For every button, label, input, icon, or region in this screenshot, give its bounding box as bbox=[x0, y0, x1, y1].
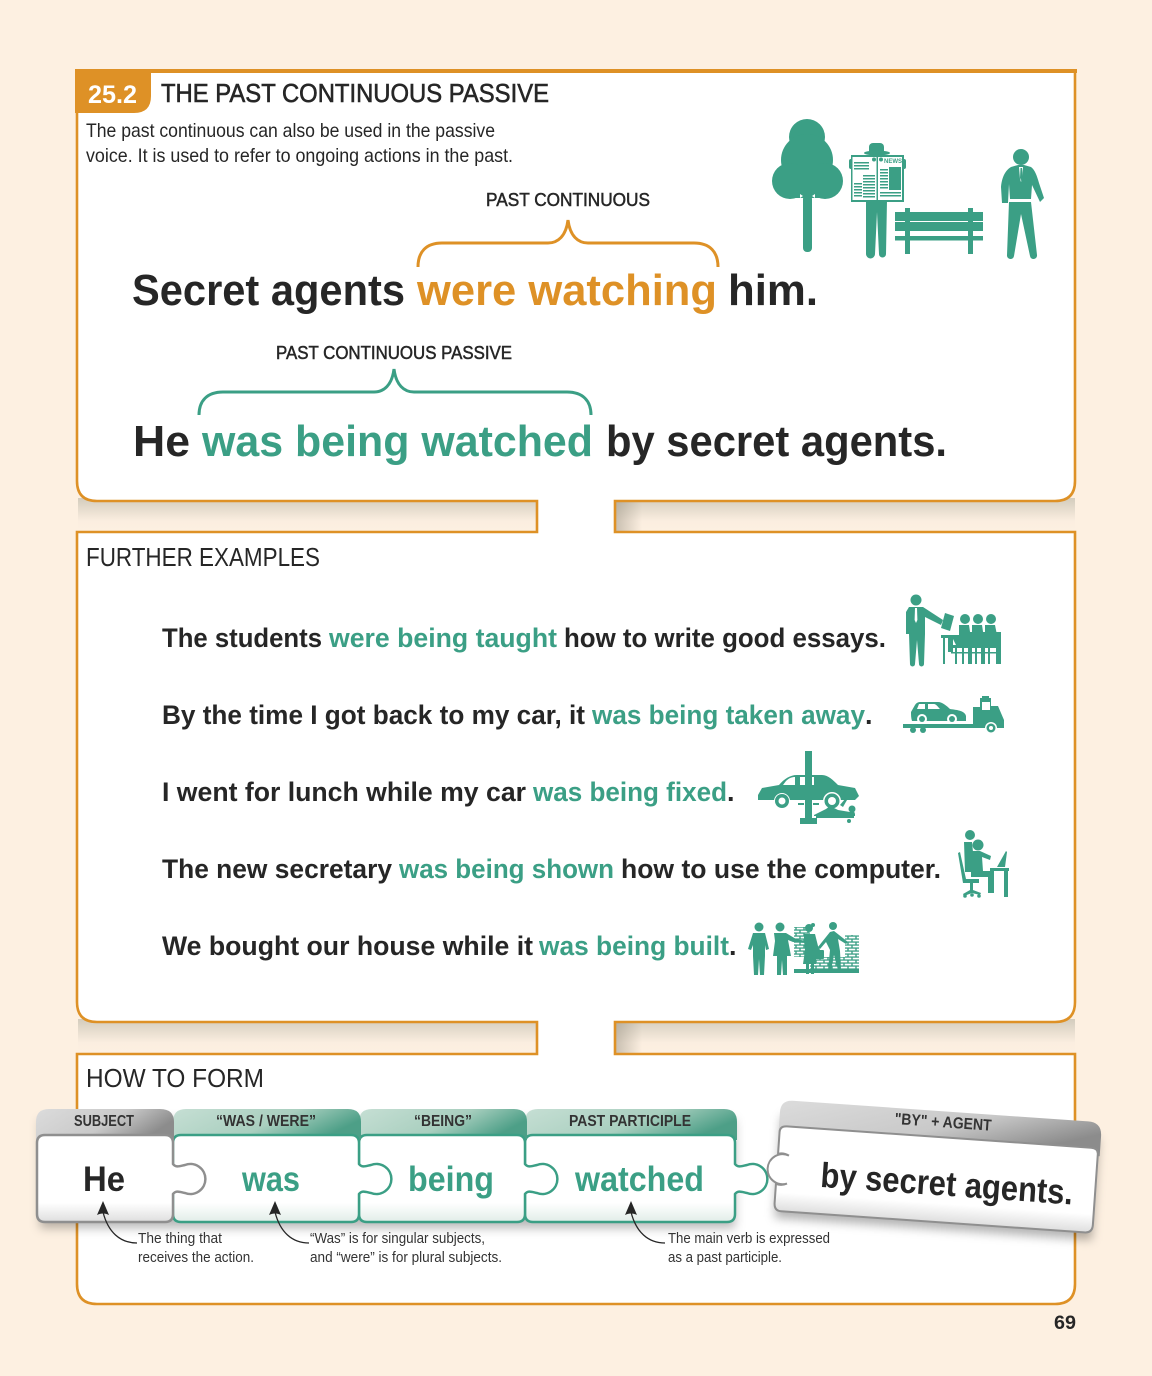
callout: subject note bbox=[97, 1201, 254, 1266]
example 3: was being fixed bbox=[532, 777, 727, 807]
callout: was / were note: “Was” is for singular subjects, bbox=[310, 1230, 485, 1247]
panel shadow in connector gaps bbox=[78, 498, 1075, 1053]
example 3 bbox=[162, 777, 735, 807]
puzzle piece: being: “BEING” bbox=[414, 1113, 472, 1130]
callout: was / were note bbox=[269, 1201, 502, 1266]
puzzle piece: by + agent: by secret agents. bbox=[819, 1156, 1074, 1212]
active sentence: were watching bbox=[416, 266, 717, 315]
callout: subject note: receives the action. bbox=[138, 1249, 254, 1266]
example 5: We bought our house while it bbox=[162, 931, 533, 961]
puzzle piece: subject: SUBJECT bbox=[74, 1113, 134, 1130]
example 4: was being shown bbox=[398, 854, 614, 884]
example 2 bbox=[162, 700, 873, 730]
example 5: was being built bbox=[538, 931, 729, 961]
callout: past participle note bbox=[625, 1201, 830, 1266]
example 1 bbox=[162, 623, 886, 653]
active sentence: Secret agents bbox=[132, 266, 405, 315]
heading: HOW TO FORM bbox=[86, 1063, 264, 1093]
heading: THE PAST CONTINUOUS PASSIVE bbox=[161, 78, 549, 108]
example 4 bbox=[162, 854, 941, 884]
passive sentence: was being watched bbox=[201, 417, 593, 466]
icon: teacher and students bbox=[906, 594, 1001, 666]
label: past continuous: PAST CONTINUOUS bbox=[486, 190, 650, 210]
puzzle piece: subject: He bbox=[83, 1160, 125, 1199]
icon: tow truck bbox=[903, 696, 1004, 734]
puzzle piece: was / were: “WAS / WERE” bbox=[216, 1113, 316, 1130]
example 5 bbox=[162, 931, 737, 961]
icon: agent with newspaper bbox=[849, 143, 906, 258]
intro text: The past continuous can also be used in the passive bbox=[86, 120, 495, 142]
panel: further examples bbox=[86, 542, 1009, 975]
label: past continuous passive: PAST CONTINUOUS PASSIVE bbox=[276, 343, 512, 363]
example 1: how to write good essays. bbox=[564, 623, 886, 653]
example 2: was being taken away bbox=[591, 700, 865, 730]
puzzle piece: past participle: PAST PARTICIPLE bbox=[569, 1113, 691, 1130]
example 4: how to use the computer. bbox=[621, 854, 941, 884]
puzzle piece: by + agent: "BY" + AGENT bbox=[894, 1111, 992, 1135]
puzzle shadow bbox=[40, 1120, 735, 1228]
passive sentence: He bbox=[133, 417, 190, 466]
heading: FURTHER EXAMPLES bbox=[86, 542, 320, 572]
page number: 69 bbox=[1054, 1313, 1076, 1334]
icon: man standing bbox=[1001, 149, 1044, 259]
icon: park scene with agent watching a man bbox=[772, 119, 1044, 259]
puzzle piece: being: being bbox=[408, 1160, 494, 1199]
section number tab bbox=[75, 69, 1077, 113]
intro text: voice. It is used to refer to ongoing actions in the past. bbox=[86, 145, 513, 167]
example 5: . bbox=[729, 931, 737, 961]
puzzle piece: was / were bbox=[173, 1109, 391, 1222]
callout: past participle note: as a past participle. bbox=[668, 1249, 782, 1266]
example 2: By the time I got back to my car, it bbox=[162, 700, 585, 730]
puzzle piece: being bbox=[359, 1109, 557, 1222]
icon: secretary at computer bbox=[958, 830, 1009, 898]
example 1: The students bbox=[162, 623, 322, 653]
panel: how to form bbox=[36, 1063, 1102, 1266]
active sentence bbox=[132, 266, 818, 315]
example 3: I went for lunch while my car bbox=[162, 777, 526, 807]
puzzle piece: by + agent bbox=[764, 1099, 1102, 1240]
example 2: . bbox=[865, 700, 873, 730]
icon: agent with newspaper: NEWS bbox=[884, 159, 902, 165]
panel: past continuous passive bbox=[75, 69, 1077, 466]
orange bracket bbox=[418, 220, 718, 267]
active sentence: him. bbox=[728, 266, 818, 315]
icon: bench bbox=[895, 208, 983, 254]
puzzle piece: past participle bbox=[525, 1109, 767, 1222]
icon: car on lift with mechanic bbox=[758, 751, 859, 824]
intro text bbox=[86, 120, 513, 167]
callout: subject note: The thing that bbox=[138, 1230, 223, 1247]
icon: tree bbox=[772, 119, 843, 252]
section number tab: 25.2 bbox=[88, 81, 137, 109]
example 4: The new secretary bbox=[162, 854, 392, 884]
puzzle piece: subject bbox=[36, 1109, 205, 1222]
callout: was / were note: and “were” is for plural subjects. bbox=[310, 1249, 502, 1266]
green bracket bbox=[199, 369, 591, 415]
icon: couple and builder by a brick wall bbox=[748, 922, 859, 975]
callout: past participle note: The main verb is expressed bbox=[668, 1230, 830, 1247]
example 3: . bbox=[727, 777, 735, 807]
puzzle piece: was / were: was bbox=[241, 1160, 300, 1199]
example 1: were being taught bbox=[328, 623, 557, 653]
passive sentence: by secret agents. bbox=[606, 417, 947, 466]
puzzle piece: past participle: watched bbox=[574, 1160, 704, 1199]
panel outline: three linked white panels bbox=[77, 71, 1075, 1304]
passive sentence bbox=[133, 417, 947, 466]
